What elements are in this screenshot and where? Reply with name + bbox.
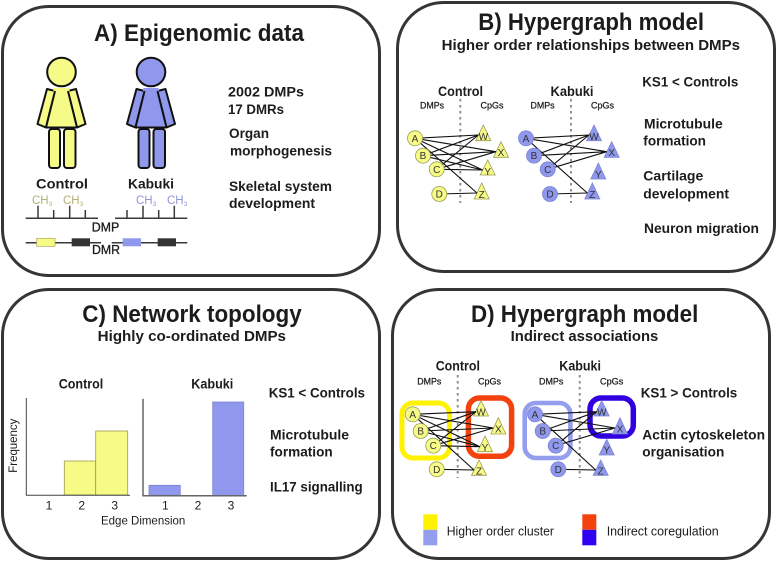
text: KS1 and enriched terms: Microtubule [270,427,350,442]
graph: Kabuki: CpGs [591,100,615,110]
text: KS1 and enriched terms [269,386,365,494]
graph: control with clusters: B [417,426,424,438]
graph: control [408,84,508,203]
graph: Kabuki: DMPs [530,100,555,110]
graph: Kabuki with clusters: Y [603,446,610,456]
control methylation track: 3 [80,201,84,208]
graph: control: Z [479,190,485,201]
text: KS1 and enriched terms: formation [643,134,706,149]
graph: Kabuki with clusters: C [552,441,559,452]
graph: control with clusters: C [430,441,437,452]
graph: control: C [433,165,440,176]
Kabuki methylation track: CH [167,195,184,207]
Kabuki methylation track: 3 [184,201,188,208]
control methylation track: CH [63,195,80,207]
text: KS1 and enriched terms: formation [270,445,333,460]
text: counts and enriched terms: development [229,196,316,211]
text: KS1 and enriched terms: development [643,186,730,201]
graph: Kabuki with clusters: CpGs [600,376,624,386]
graph: control: X [498,148,505,159]
bar chart: Kabuki: 3 [228,499,235,513]
label: DMR: DMR [92,243,120,257]
panel B: hypergraph model, higher order relationships [398,2,774,272]
graph: control: Y [484,167,491,178]
graph: Kabuki [518,84,619,203]
text: KS1 and enriched terms [642,75,759,236]
graph: control: Control [438,84,483,99]
text: counts and enriched terms: Organ [229,126,269,141]
text: KS1 and enriched terms: Cartilage [643,168,704,183]
graph: control with clusters [402,359,512,478]
control methylation track: CH [32,195,49,207]
graph: Kabuki with clusters: B [539,426,546,438]
bar chart: Kabuki: Kabuki [191,377,233,392]
bar chart: control: 2 [78,499,85,513]
graph: Kabuki with clusters: DMPs [539,376,564,386]
graph: control with clusters: A [409,410,416,421]
label: DMP: DMP [92,221,119,235]
heading: C) Network topology: C) Network topology [82,301,302,328]
icon: control figure [38,58,86,168]
graph: Kabuki with clusters: Z [598,466,604,478]
heading: A) Epigenomic data: A) Epigenomic data [94,20,304,47]
Kabuki methylation track: CH [136,195,153,207]
control methylation track [26,195,98,218]
graph: Kabuki: A [523,134,530,145]
graph: Kabuki with clusters: A [532,410,539,421]
graph: control with clusters: Y [482,443,489,454]
heading: B) Hypergraph model: B) Hypergraph model [478,9,704,36]
panel A: epigenomic data [2,6,380,276]
graph: control with clusters: D [433,465,440,476]
label: Control: Control [36,176,88,192]
graph: control: B [420,151,427,162]
graph: control: DMPs [420,100,445,110]
heading: D) Hypergraph model: D) Hypergraph model [471,301,698,328]
graph: Kabuki: W [589,132,599,143]
text: counts and enriched terms [228,85,332,211]
subheading: Higher order relationships between DMPs [442,38,740,54]
panel C: network topology [2,290,380,558]
subheading: Highly co-ordinated DMPs [98,329,286,345]
legend: indirect coregulation [582,514,719,545]
text: KS1 and enriched terms: KS1 > Controls [641,386,737,401]
text: counts and enriched terms: Skeletal system [229,179,332,194]
text: counts and enriched terms: morphogenesis [230,144,332,159]
graph: control: D [436,190,443,200]
graph: control: CpGs [480,100,504,110]
graph: Kabuki with clusters: X [617,424,624,436]
legend: higher order cluster: Higher order cluster [447,524,554,538]
text: KS1 and enriched terms: Actin cytoskeleton [642,427,765,442]
bar chart: control [26,377,130,513]
panel D: hypergraph model, indirect associations [392,290,770,558]
icon: Kabuki figure [127,58,175,168]
bar chart: control: 3 [111,499,118,513]
graph: control: A [412,134,419,145]
graph: control: W [479,132,489,143]
bar chart: control: Control [59,377,103,392]
graph: Kabuki: B [531,151,538,162]
graph: Kabuki: Y [595,170,602,181]
graph: control with clusters: Control [436,359,480,374]
text: counts and enriched terms: 17 DMRs [228,102,284,117]
text: KS1 and enriched terms: IL17 signalling [270,479,363,494]
bar chart: Kabuki: 1 [162,499,169,513]
text: KS1 and enriched terms: KS1 < Controls [642,75,738,90]
graph: control with clusters: W [476,408,486,418]
graph: control with clusters: CpGs [478,376,502,386]
text: KS1 and enriched terms: Neuron migration [644,221,759,236]
text: counts and enriched terms: 2002 DMPs [228,85,304,100]
graph: control with clusters: X [495,424,502,436]
graph: control with clusters: Z [476,466,482,478]
graph: Kabuki with clusters: Kabuki [559,359,601,374]
graph: Kabuki with clusters: W [597,408,607,418]
Kabuki methylation track [115,195,188,218]
bar chart: Kabuki: 2 [195,499,202,513]
graph: Kabuki: C [544,165,551,176]
graph: Kabuki: Z [589,190,595,201]
graph: Kabuki: X [608,148,615,159]
axis label: Edge Dimension: Edge Dimension [101,513,185,527]
graph: Kabuki: D [546,190,554,200]
bar chart: control: 1 [46,499,53,513]
subheading: Indirect associations [511,329,658,345]
control methylation track: 3 [49,201,53,208]
text: KS1 and enriched terms [641,386,765,460]
bar chart: Kabuki [143,377,247,513]
legend: indirect coregulation: Indirect coregulation [607,524,719,538]
Kabuki methylation track: 3 [153,201,157,208]
region track [26,238,187,246]
graph: Kabuki: Kabuki [550,84,594,99]
graph: Kabuki with clusters: D [555,465,562,476]
text: KS1 and enriched terms: organisation [642,445,724,460]
text: KS1 and enriched terms: KS1 < Controls [269,386,365,401]
graph: Kabuki with clusters [525,359,633,478]
text: KS1 and enriched terms: Microtubule [644,116,723,131]
graph: control with clusters: DMPs [417,376,442,386]
legend: higher order cluster [423,514,554,545]
label: Kabuki: Kabuki [128,176,174,192]
axis label: Frequency: Frequency [6,419,20,473]
